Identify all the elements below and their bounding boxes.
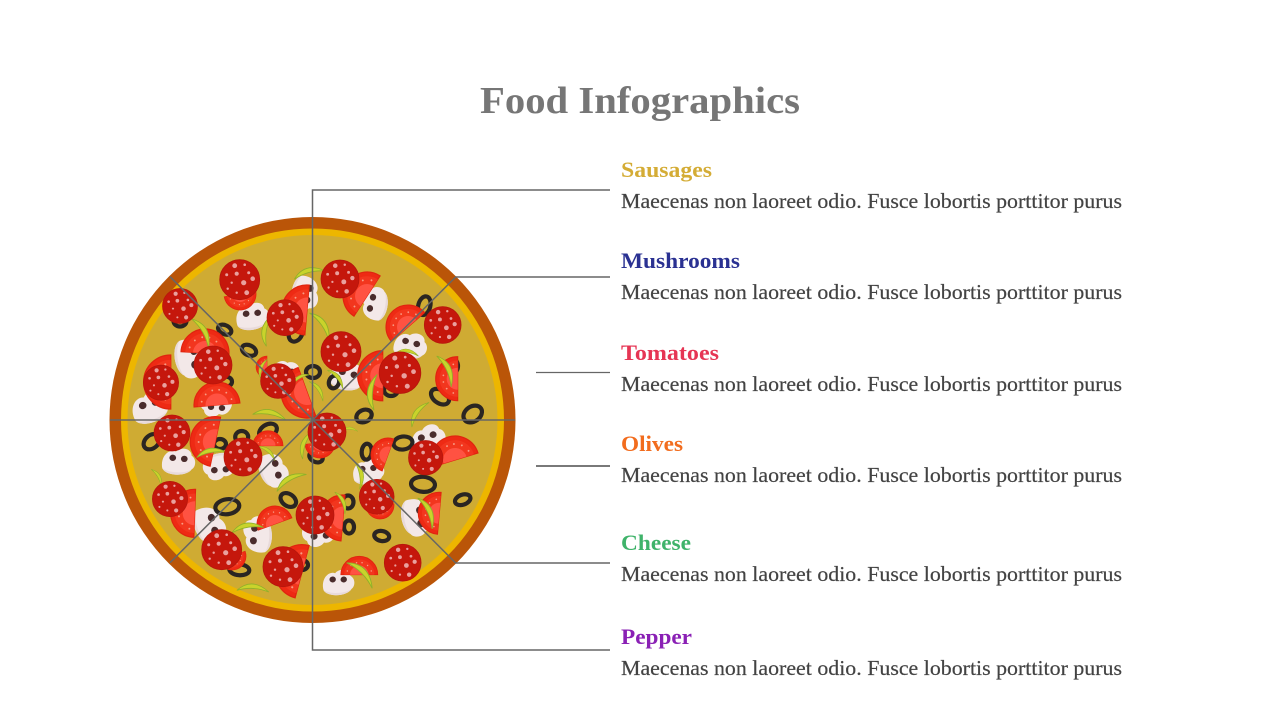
description: Olives: Maecenas non laoreet odio. Fusce lobortis porttitor purus (621, 463, 1122, 487)
item: Cheese (621, 530, 1122, 586)
heading: Sausages: Sausages (621, 157, 712, 182)
leader lines and slice cuts (110, 190, 610, 650)
pepperoni slices (143, 260, 461, 587)
heading: Pepper: Pepper (621, 624, 692, 649)
description: Cheese: Maecenas non laoreet odio. Fusce lobortis porttitor purus (621, 562, 1122, 586)
description: Mushrooms: Maecenas non laoreet odio. Fusce lobortis porttitor purus (621, 280, 1122, 304)
pizza crust (110, 217, 516, 623)
item: Olives (621, 431, 1122, 487)
description: Tomatoes: Maecenas non laoreet odio. Fusce lobortis porttitor purus (621, 372, 1122, 396)
pizza illustration (110, 217, 516, 623)
description: Pepper: Maecenas non laoreet odio. Fusce lobortis porttitor purus (621, 656, 1122, 680)
item: Sausages (621, 157, 1122, 213)
title: Food Infographics (480, 80, 800, 122)
item: Pepper (621, 624, 1122, 680)
heading: Olives: Olives (621, 431, 683, 456)
description: Sausages: Maecenas non laoreet odio. Fusce lobortis porttitor purus (621, 189, 1122, 213)
tomato slices (144, 263, 478, 598)
mushrooms (128, 274, 450, 596)
heading: Tomatoes: Tomatoes (621, 340, 719, 365)
heading: Cheese: Cheese (621, 530, 691, 555)
item: Tomatoes (621, 340, 1122, 396)
heading: Mushrooms: Mushrooms (621, 248, 740, 273)
pepper strips (151, 264, 458, 592)
pizza yellow rim (121, 228, 504, 612)
pizza cheese base (128, 235, 498, 605)
olives (141, 295, 485, 576)
item: Mushrooms (621, 248, 1122, 304)
